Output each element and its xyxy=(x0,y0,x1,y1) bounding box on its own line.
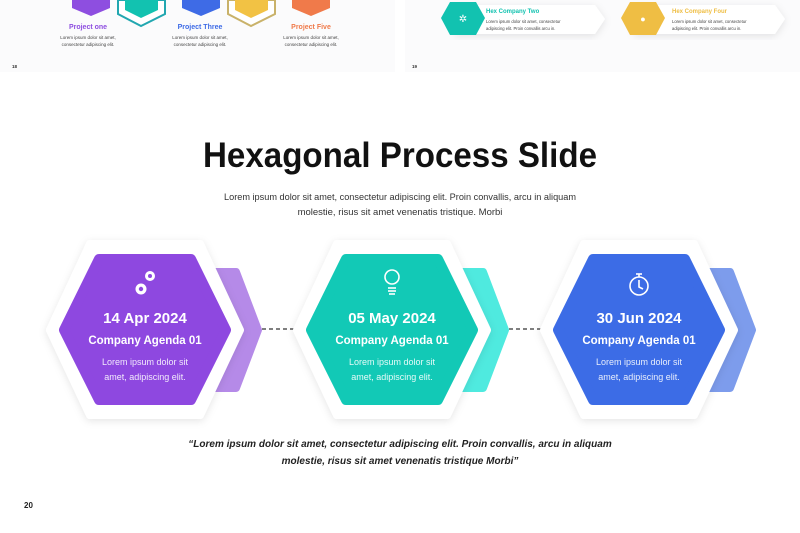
quote xyxy=(188,439,612,467)
step 3: blue: amet, adipiscing elit. xyxy=(598,372,680,382)
page number: 20 xyxy=(24,501,33,510)
step 2: teal xyxy=(297,244,505,415)
step 2: teal: 05 May 2024 xyxy=(348,310,436,327)
slide 19 thumbnail content: Hex Company Two xyxy=(486,9,540,15)
slide 19 thumbnail content: adipiscing elit. Proin convallis arcu in. xyxy=(672,26,741,31)
top strip: previous slides xyxy=(0,0,800,72)
step 1: purple: Company Agenda 01 xyxy=(88,335,202,347)
step 1: purple: 14 Apr 2024 xyxy=(103,310,187,327)
slide 18 thumbnail content: Lorem ipsum dolor sit amet, xyxy=(283,35,339,40)
step 1: purple xyxy=(50,244,258,415)
slide 18 thumbnail content: consectetur adipiscing elit. xyxy=(174,42,226,47)
slide 19 thumbnail content xyxy=(412,2,785,69)
slide 18 thumbnail content: consectetur adipiscing elit. xyxy=(62,42,114,47)
step 3: blue: 30 Jun 2024 xyxy=(596,310,682,327)
slide 18 thumbnail content: Lorem ipsum dolor sit amet, xyxy=(172,35,228,40)
icon: light bulb xyxy=(385,270,399,294)
slide 19 thumbnail content: 19 xyxy=(412,64,418,69)
step 2: teal: Lorem ipsum dolor sit xyxy=(349,357,436,367)
step 2: teal: Company Agenda 01 xyxy=(335,335,449,347)
title: Hexagonal Process Slide xyxy=(203,136,597,175)
slide 18 thumbnail content: Project Five xyxy=(291,24,331,31)
step 1: purple: Lorem ipsum dolor sit xyxy=(102,357,189,367)
slide 19 thumbnail content: ● xyxy=(640,14,646,24)
slide 18 thumbnail content: Lorem ipsum dolor sit amet, xyxy=(60,35,116,40)
slide 19 thumbnail content: ✲ xyxy=(459,14,467,25)
step 1: purple: amet, adipiscing elit. xyxy=(104,372,186,382)
icon: stopwatch xyxy=(630,274,648,295)
slide 18 thumbnail content: Project Three xyxy=(178,24,222,31)
subtitle: Lorem ipsum dolor sit amet, consectetur adipiscing elit. Proin convallis, arcu in aliquam xyxy=(224,192,576,203)
subtitle xyxy=(224,192,576,218)
step 3: blue xyxy=(544,244,752,415)
slide 18 thumbnail content: consectetur adipiscing elit. xyxy=(285,42,337,47)
quote: molestie, risus sit amet venenatis tristique Morbi” xyxy=(282,456,518,467)
slide 19 thumbnail content: adipiscing elit. Proin convallis arcu in. xyxy=(486,26,555,31)
step 3: blue: Company Agenda 01 xyxy=(582,335,696,347)
quote: “Lorem ipsum dolor sit amet, consectetur adipiscing elit. Proin convallis, arcu in aliquam xyxy=(188,439,612,450)
slide 18 thumbnail content xyxy=(12,0,339,69)
subtitle: molestie, risus sit amet venenatis tristique. Morbi xyxy=(298,207,502,218)
slide 18 thumbnail content: 18 xyxy=(12,64,18,69)
slide 18 thumbnail content: Project one xyxy=(69,24,107,31)
icon: gears xyxy=(136,271,155,294)
slide 19 thumbnail content: Hex Company Four xyxy=(672,9,728,15)
step 3: blue: Lorem ipsum dolor sit xyxy=(596,357,683,367)
slide 19 thumbnail content: Lorem ipsum dolor sit amet, consectetur xyxy=(486,19,561,24)
dashed connectors xyxy=(262,328,549,330)
slide 19 thumbnail content: Lorem ipsum dolor sit amet, consectetur xyxy=(672,19,747,24)
step 2: teal: amet, adipiscing elit. xyxy=(351,372,433,382)
